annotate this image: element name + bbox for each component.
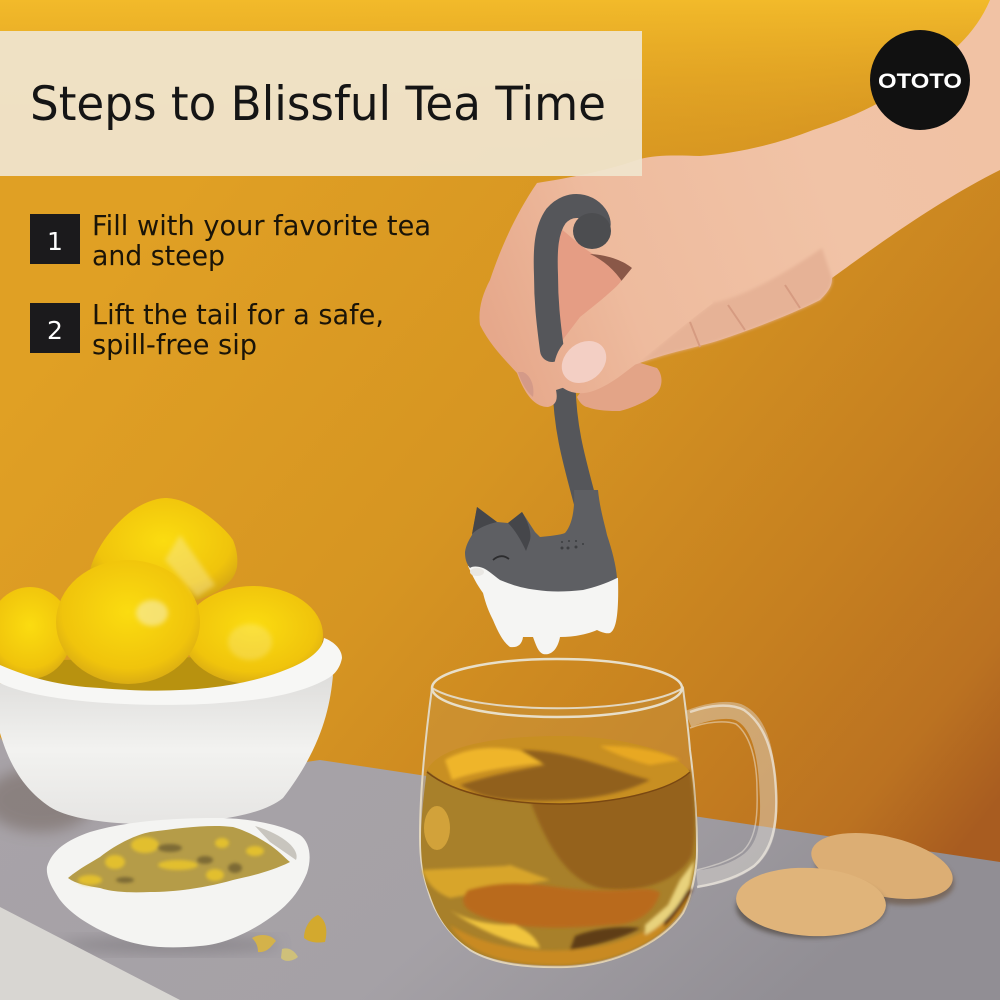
cat tail lower: [564, 385, 586, 505]
scattered herb flowers: [252, 915, 326, 961]
tea surface: [427, 736, 690, 804]
cat eye: [493, 556, 509, 560]
title banner: [0, 31, 642, 176]
step 1: [30, 209, 431, 272]
lemon right: [183, 586, 323, 684]
tail tip: [573, 213, 611, 249]
number badge 1: [30, 214, 80, 264]
cat tea infuser: [465, 490, 618, 654]
step 1 text: and steep: [92, 239, 225, 272]
logo: OTOTO: OTOTO: [878, 70, 962, 93]
small herb dish: [47, 818, 310, 947]
bowl rim: [0, 638, 342, 705]
number badge 1: 1: [47, 227, 63, 256]
mug body: [420, 688, 697, 967]
table cloth: [0, 737, 1000, 1000]
tail upper: [546, 206, 599, 350]
lemon top: [90, 498, 237, 600]
curled fingers: [577, 362, 662, 411]
title: Steps to Blissful Tea Time: [30, 77, 606, 132]
index fingernail: [518, 372, 533, 397]
mug handle: [688, 706, 776, 887]
air holes: [560, 540, 584, 550]
lower reflections: [422, 860, 695, 965]
palm shadow: [590, 254, 632, 283]
forearm and palm: [479, 0, 1000, 407]
step 2 text: Lift the tail for a safe,: [92, 298, 384, 331]
lemon left: [0, 587, 72, 679]
bowl body: [0, 675, 333, 824]
cat ears: [472, 507, 530, 551]
cat grey body: [465, 490, 617, 592]
tea dark shadow: [530, 770, 695, 890]
bowl inner shade: [0, 640, 324, 700]
thumb: [554, 267, 713, 393]
surface reflections: [445, 746, 680, 801]
number badge 2: 2: [47, 316, 63, 345]
step 1 text: Fill with your favorite tea: [92, 209, 431, 242]
number badge 2: [30, 303, 80, 353]
tea body: [421, 770, 696, 965]
lower palm creases: [690, 285, 800, 347]
tea surface front edge: [427, 772, 690, 804]
lemon reflection: [424, 806, 450, 850]
inner palm: [554, 228, 632, 350]
lemon highlights: [136, 535, 272, 660]
step 2: [30, 298, 384, 361]
lower palm: [640, 248, 832, 363]
cat nose: [470, 568, 484, 576]
lemon front: [56, 560, 200, 684]
cookies: [734, 822, 959, 940]
cat white belly: [468, 565, 618, 654]
mug rim: [432, 659, 682, 717]
step 2 text: spill-free sip: [92, 328, 257, 361]
hand and arm: [479, 0, 1000, 411]
glass mug with tea: [420, 659, 776, 967]
thumb nail: [553, 332, 615, 392]
dried herbs: [68, 826, 290, 892]
lemons in a bowl: [0, 498, 342, 824]
napkin: [0, 907, 180, 1000]
logo: OTOTO: [870, 30, 970, 130]
